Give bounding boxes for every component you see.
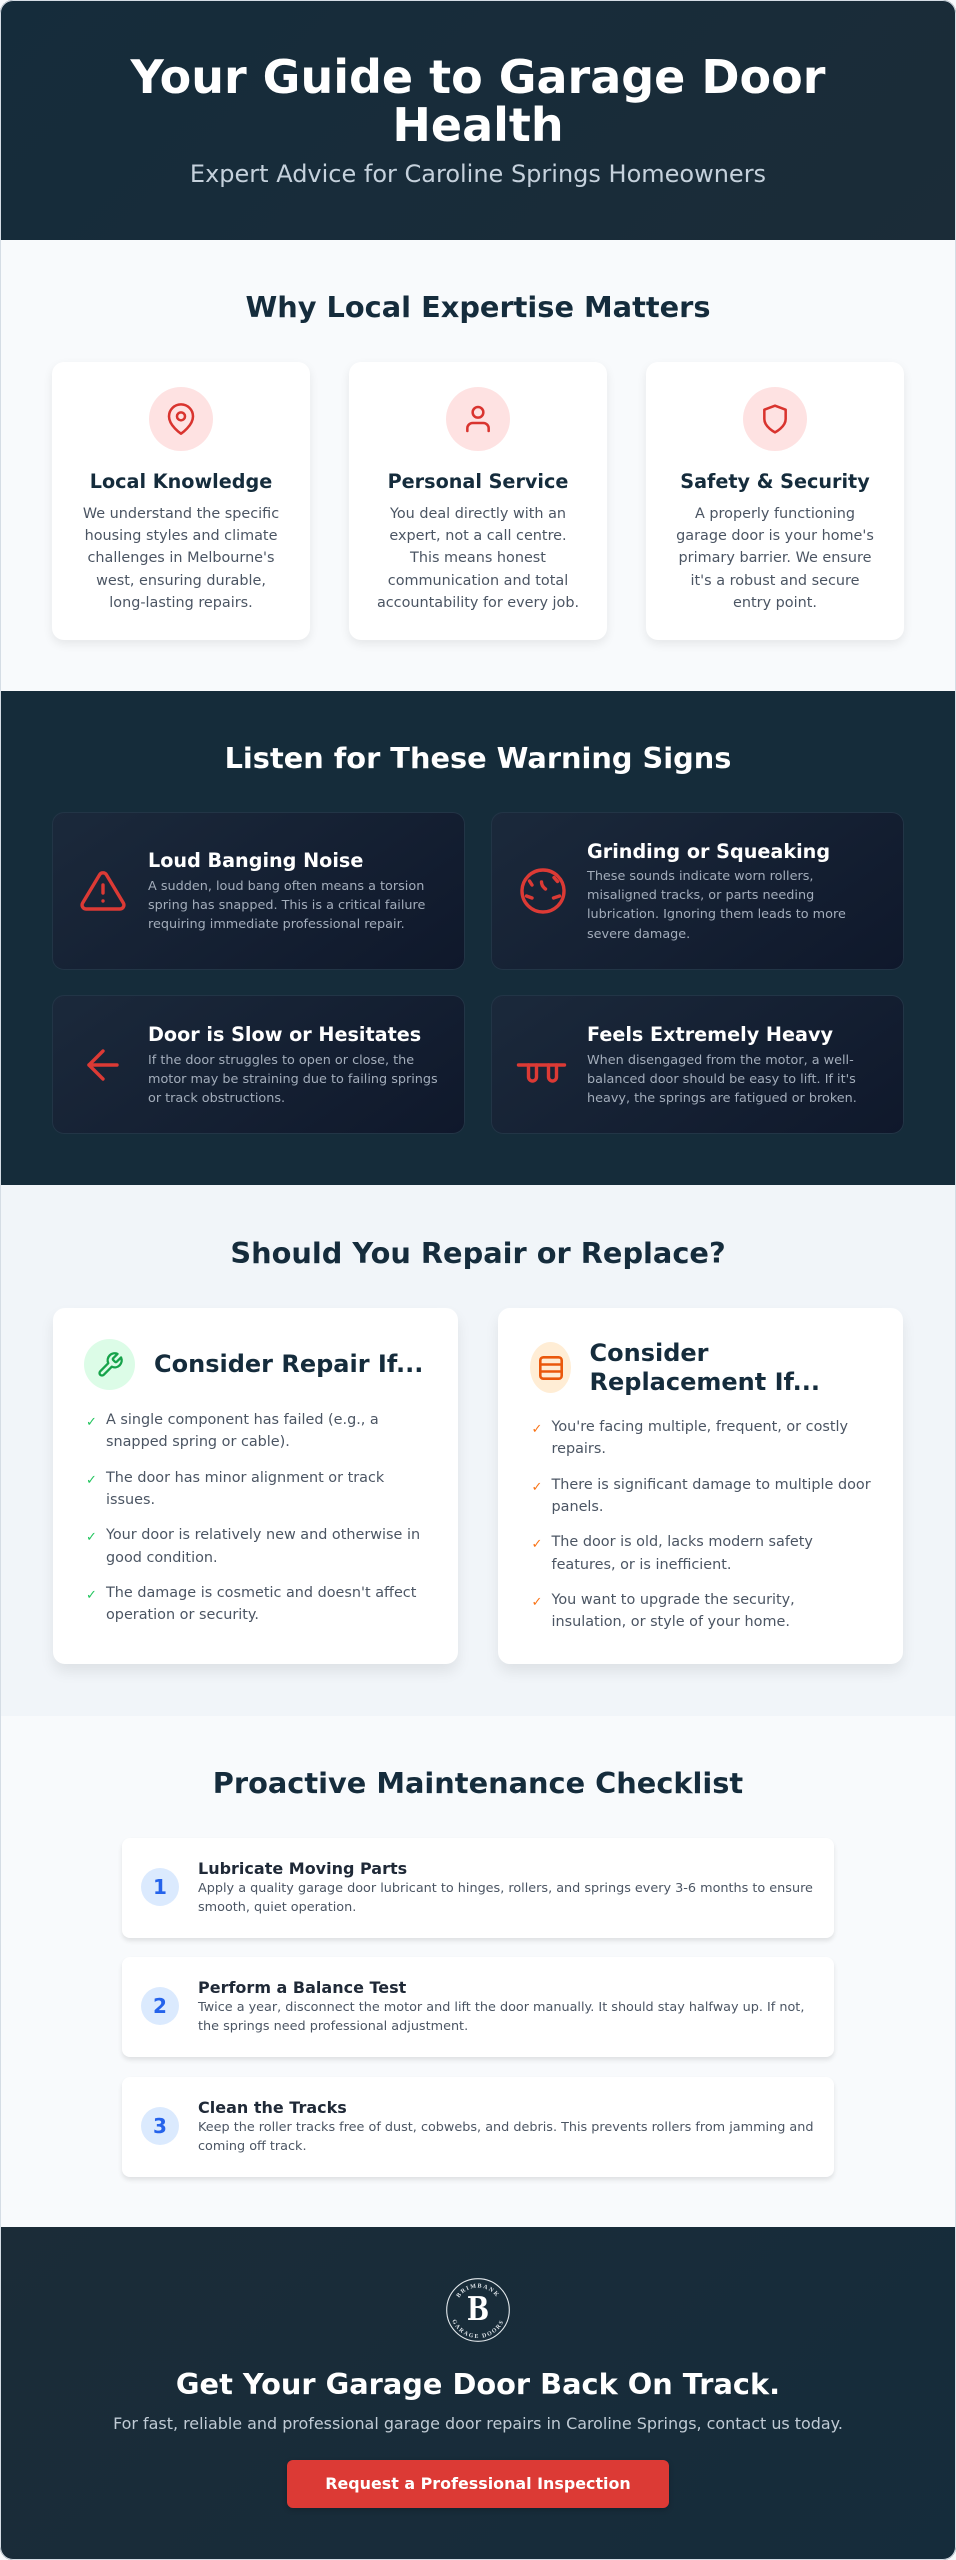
checklist item 2 [122, 1957, 834, 2057]
number badge [141, 1987, 179, 2025]
warning card: loud banging noise [52, 812, 465, 970]
card: consider repair: The door has minor alignment or track [106, 1470, 384, 1486]
card: consider repair: Your door is relatively new and otherwise in [106, 1527, 420, 1543]
warning text: heavy, the springs are fatigued or broken. [587, 1091, 857, 1106]
warning text: lubrication. Ignoring them leads to more [587, 907, 846, 922]
heading: Listen for These Warning Signs [225, 740, 731, 774]
warning text: severe damage. [587, 927, 690, 942]
warning title: Door is Slow or Hesitates [148, 1022, 421, 1046]
warning text: These sounds indicate worn rollers, [587, 869, 813, 884]
icon: warning triangle [80, 871, 126, 911]
warning card: door is slow or hesitates [52, 995, 465, 1134]
card title: Local Knowledge [90, 470, 272, 493]
number badge: 3 [153, 2114, 167, 2138]
icon: gauge [520, 868, 566, 914]
number badge [141, 2107, 179, 2145]
card: consider replacement: ✓ [532, 1422, 542, 1437]
card text: challenges in Melbourne's [88, 550, 274, 566]
item text: Apply a quality garage door lubricant to hinges, rollers, and springs every 3-6 months to ensure [198, 1881, 813, 1896]
item text: Keep the roller tracks free of dust, cobwebs, and debris. This prevents rollers from jamming and [198, 2120, 813, 2135]
warning text: balanced door should be easy to lift. If it's [587, 1072, 856, 1087]
text: For fast, reliable and professional garage door repairs in Caroline Springs, contact us today. [113, 2414, 843, 2433]
icon: map pin [149, 387, 213, 451]
card: personal service [349, 362, 607, 640]
item text: smooth, quiet operation. [198, 1900, 356, 1915]
card: consider replacement: panels. [552, 1499, 604, 1515]
card: consider repair: ✓ [86, 1588, 97, 1603]
card: consider replacement: You're facing multiple, frequent, or costly [552, 1419, 848, 1435]
number badge: 1 [153, 1875, 167, 1899]
card: consider repair: ✓ [86, 1415, 97, 1430]
card heading [590, 1339, 820, 1396]
card text: A properly functioning [695, 506, 855, 522]
card text [83, 506, 279, 611]
warning text: motor may be straining due to failing springs [148, 1072, 438, 1087]
warning title: Loud Banging Noise [148, 848, 363, 872]
item text: the springs need professional adjustment. [198, 2019, 468, 2034]
card: consider repair: The damage is cosmetic and doesn't affect [106, 1585, 416, 1601]
card text: long-lasting repairs. [109, 595, 253, 611]
warning text [586, 869, 846, 942]
panel: footer call to action [0, 2227, 956, 2560]
list item [532, 1534, 813, 1573]
card text: communication and total [388, 573, 568, 589]
logo: BRIMBANK [456, 2284, 499, 2298]
card heading: Consider [590, 1339, 708, 1367]
card text: This means honest [410, 550, 546, 566]
card text: entry point. [733, 595, 817, 611]
list item [532, 1419, 848, 1457]
card text: accountability for every job. [377, 595, 579, 611]
card: consider replacement [498, 1308, 903, 1664]
item text [198, 1881, 813, 1915]
warning text: When disengaged from the motor, a well- [587, 1053, 854, 1068]
number badge: 2 [153, 1994, 167, 2018]
warning text: or track obstructions. [148, 1091, 285, 1106]
list item [532, 1477, 871, 1515]
card: consider repair: issues. [106, 1492, 155, 1508]
warning text [148, 879, 425, 932]
card: consider replacement: features, or is inefficient. [552, 1557, 731, 1573]
warning text: A sudden, loud bang often means a torsion [148, 879, 424, 894]
list item [86, 1470, 384, 1508]
list item [86, 1527, 420, 1566]
card: consider replacement: insulation, or style of your home. [552, 1614, 790, 1630]
card: consider repair: operation or security. [106, 1607, 259, 1623]
heading: Should You Repair or Replace? [230, 1236, 726, 1270]
title [130, 50, 826, 152]
title: Health [392, 98, 564, 152]
item title: Lubricate Moving Parts [198, 1859, 407, 1878]
card text: You deal directly with an [390, 506, 566, 522]
warning card: grinding or squeaking [491, 812, 904, 970]
logo: GARAGE DOORS [452, 2320, 503, 2338]
card: consider replacement: There is significant damage to multiple door [552, 1477, 871, 1493]
icon: person [446, 387, 510, 451]
item text: Twice a year, disconnect the motor and lift the door manually. It should stay halfway up. If not, [198, 2000, 804, 2015]
card: consider replacement: You want to upgrade the security, [552, 1592, 795, 1608]
card: safety and security [646, 362, 904, 640]
item text: coming off track. [198, 2139, 307, 2154]
card: consider repair: good condition. [106, 1550, 218, 1566]
card text: it's a robust and secure [691, 573, 859, 589]
card: consider replacement: ✓ [532, 1595, 542, 1610]
warning text [148, 1053, 438, 1106]
warning title: Grinding or Squeaking [587, 840, 830, 862]
card heading: Consider Repair If... [154, 1350, 423, 1378]
icon: springs [516, 1063, 566, 1083]
card text [377, 506, 579, 611]
item title: Perform a Balance Test [198, 1978, 406, 1997]
logo: B [467, 2290, 489, 2329]
card: consider replacement: repairs. [552, 1441, 606, 1457]
card: consider repair: ✓ [86, 1530, 97, 1545]
icon: wrench [84, 1339, 135, 1390]
icon: left arrow [87, 1049, 119, 1081]
list item [532, 1592, 795, 1630]
card: consider repair [53, 1308, 458, 1664]
card: consider replacement: ✓ [532, 1537, 542, 1552]
icon: shield [743, 387, 807, 451]
warning text: If the door struggles to open or close, the [148, 1053, 414, 1068]
checklist item 1 [122, 1838, 834, 1938]
card: consider repair: A single component has failed (e.g., a [106, 1412, 379, 1428]
item title: Clean the Tracks [198, 2098, 347, 2117]
list item [86, 1412, 379, 1450]
card text: primary barrier. We ensure [679, 550, 871, 566]
list item [86, 1585, 416, 1623]
card: consider replacement: ✓ [532, 1480, 542, 1495]
warning text: misaligned tracks, or parts needing [587, 888, 814, 903]
checklist item 3 [122, 2077, 834, 2177]
panel: warning signs [0, 691, 956, 1185]
button: Request a Professional Inspection [325, 2474, 631, 2493]
logo [446, 2278, 510, 2342]
number badge [141, 1868, 179, 1906]
card: consider repair: snapped spring or cable). [106, 1434, 290, 1450]
card title: Safety & Security [680, 470, 870, 493]
warning text [587, 1053, 857, 1106]
card text: We understand the specific [83, 506, 279, 522]
warning text: requiring immediate professional repair. [148, 917, 405, 932]
icon: door panels [530, 1342, 571, 1393]
button [287, 2460, 669, 2508]
item text [198, 2120, 813, 2154]
panel: header [0, 0, 956, 240]
subtitle: Expert Advice for Caroline Springs Homeowners [190, 160, 766, 188]
warning text: spring has snapped. This is a critical failure [148, 898, 425, 913]
panel: why local expertise matters [0, 240, 956, 691]
card text: housing styles and climate [85, 528, 277, 544]
item text [198, 2000, 804, 2034]
card text: garage door is your home's [676, 528, 874, 544]
card heading: Replacement If... [590, 1368, 820, 1396]
warning card: feels extremely heavy [491, 995, 904, 1134]
card: consider repair: ✓ [86, 1473, 97, 1488]
panel: repair or replace [0, 1185, 956, 1716]
heading: Why Local Expertise Matters [245, 290, 710, 324]
warning title: Feels Extremely Heavy [587, 1022, 833, 1046]
card: consider replacement: The door is old, lacks modern safety [552, 1534, 813, 1550]
heading: Get Your Garage Door Back On Track. [176, 2366, 780, 2400]
card: local knowledge [52, 362, 310, 640]
panel: maintenance checklist [0, 1716, 956, 2227]
heading: Proactive Maintenance Checklist [213, 1766, 743, 1800]
title: Your Guide to Garage Door [131, 50, 825, 104]
card text: west, ensuring durable, [96, 573, 266, 589]
card text [676, 506, 874, 611]
card title: Personal Service [388, 470, 568, 493]
card text: expert, not a call centre. [389, 528, 567, 544]
